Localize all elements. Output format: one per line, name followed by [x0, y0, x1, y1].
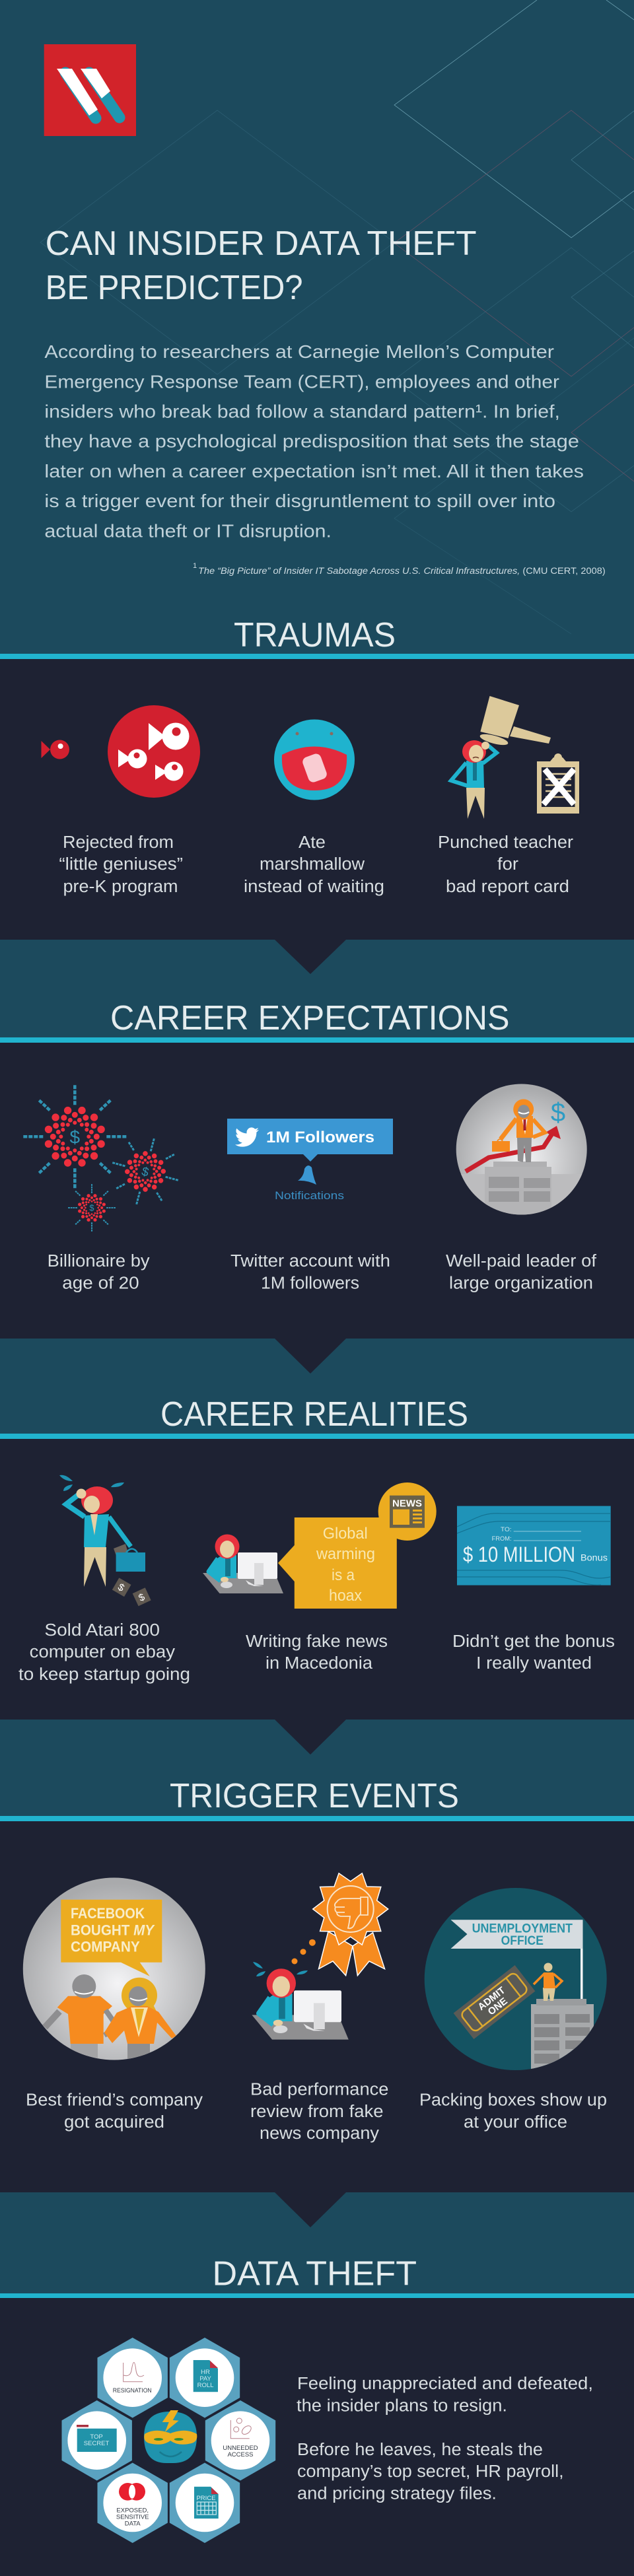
icon: twitter followers: 1M Followers — [266, 1129, 374, 1146]
panel: career realities — [0, 1439, 634, 1755]
caption: punched teacher — [438, 833, 574, 896]
geometric line pattern — [40, 0, 634, 634]
icon: news badge — [378, 1482, 437, 1541]
hexagon: resignation — [98, 2338, 168, 2418]
icon: unemployment office: ONE — [486, 1996, 510, 2017]
caption: punched teacher: for — [497, 855, 519, 874]
icon: bonus check: $ 10 MILLION — [463, 1543, 575, 1566]
title — [46, 225, 477, 307]
caption: punched teacher: Punched teacher — [438, 833, 574, 852]
caption: atari: Sold Atari 800 — [44, 1621, 160, 1640]
hexagon: resignation: RESIGNATION — [113, 2387, 152, 2394]
text: data theft description: Feeling unappreciated and defeated, — [297, 2375, 593, 2393]
hexagon: top secret: SECRET — [84, 2440, 109, 2447]
caption: packing boxes: at your office — [464, 2113, 567, 2132]
icon: leader on building — [456, 1084, 587, 1220]
icon: unemployment office: UNEMPLOYMENT — [472, 1922, 573, 1936]
logo — [44, 44, 136, 136]
intro paragraph: they have a psychological predisposition that sets the stage — [44, 431, 579, 452]
section rule — [0, 1816, 634, 1821]
speech bubble: fake news: hoax — [329, 1587, 362, 1605]
intro paragraph: is a trigger event for their disgruntlement to spill over into — [44, 491, 555, 511]
panel: traumas — [0, 659, 634, 974]
icon: person at desk — [203, 1535, 283, 1593]
caption: bad performance: Bad performance — [250, 2081, 388, 2099]
hexagon: exposed data: EXPOSED, — [116, 2507, 149, 2514]
caption: fake news: Writing fake news — [246, 1632, 388, 1651]
caption: bad performance — [250, 2081, 388, 2143]
text: data theft description: company’s top secret, HR payroll, — [297, 2462, 564, 2481]
icon: twitter followers — [227, 1119, 393, 1202]
caption: best friend — [26, 2091, 203, 2132]
hexagon: exposed data: SENSITIVE — [116, 2513, 149, 2521]
caption: atari — [18, 1621, 190, 1684]
icon: unemployment office: ADMIT — [476, 1985, 507, 2013]
caption: fake news: in Macedonia — [265, 1654, 373, 1673]
caption: leader: Well-paid leader of — [446, 1252, 597, 1271]
speech bubble: fake news: is a — [332, 1566, 355, 1584]
heading: career expectations: CAREER EXPECTATIONS — [110, 999, 510, 1037]
icon: friends with speech bubble: FACEBOOK — [71, 1905, 145, 1922]
icon: crying person with briefcase: $ — [137, 1591, 147, 1604]
hexagon: hr payroll — [170, 2338, 240, 2418]
caption: rejected: pre-K program — [63, 878, 178, 896]
title: BE PREDICTED? — [46, 269, 303, 307]
speech bubble: fake news: Global — [323, 1525, 368, 1543]
hexagon: price — [170, 2463, 240, 2543]
icon: masked hero — [144, 2410, 197, 2463]
icon: crying person with briefcase: $ — [116, 1582, 127, 1594]
hexagon: exposed data: DATA — [125, 2520, 141, 2527]
intro paragraph — [44, 341, 584, 541]
caption: bonus: Didn’t get the bonus — [452, 1632, 615, 1651]
hexagon: hr payroll: ROLL — [197, 2382, 213, 2389]
title: CAN INSIDER DATA THEFT — [46, 225, 477, 263]
caption: rejected: Rejected from — [63, 833, 174, 852]
caption: twitter — [230, 1252, 390, 1293]
caption: marshmallow — [244, 833, 384, 896]
heading: traumas: TRAUMAS — [234, 616, 396, 654]
icon: bonus check: FROM: — [492, 1535, 512, 1542]
icon: gavel — [479, 696, 551, 747]
icon: bonus check — [457, 1506, 611, 1585]
hexagon: unneeded access: ACCESS — [227, 2451, 254, 2458]
caption: atari: computer on ebay — [30, 1643, 175, 1661]
hexagon: hr payroll: PAY — [199, 2375, 211, 2383]
hexagon: top secret — [62, 2400, 132, 2480]
caption: bad performance: news company — [260, 2124, 379, 2143]
icon: friends with speech bubble: COMPANY — [71, 1939, 140, 1955]
hexagon: unneeded access: UNNEEDED — [223, 2445, 258, 2452]
caption: punched teacher: bad report card — [446, 878, 569, 896]
caption: rejected — [59, 833, 183, 896]
caption: billionaire — [48, 1252, 150, 1293]
footnote — [193, 562, 606, 576]
speech bubble: fake news: warming — [316, 1545, 375, 1563]
panel: career expectations — [0, 1043, 634, 1374]
icon: news badge: NEWS — [392, 1499, 422, 1510]
caption: bonus: I really wanted — [476, 1654, 592, 1673]
icon: small fish — [41, 740, 69, 759]
hexagon: unneeded access — [205, 2400, 275, 2480]
caption: rejected: “little geniuses” — [59, 855, 183, 874]
caption: fake news — [246, 1632, 388, 1673]
intro paragraph: insiders who break bad follow a standard pattern¹. In brief, — [44, 401, 560, 421]
footnote: 1 — [193, 562, 197, 570]
section rule — [0, 1434, 634, 1439]
icon: marshmallow face — [274, 720, 355, 800]
speech bubble: fake news — [278, 1517, 397, 1609]
heading: career realities: CAREER REALITIES — [160, 1395, 468, 1434]
caption: billionaire: age of 20 — [62, 1274, 139, 1293]
caption: leader — [446, 1252, 597, 1293]
caption: packing boxes — [419, 2091, 607, 2132]
hexagon: price: PRICE — [196, 2495, 216, 2502]
panel: data theft — [0, 2298, 634, 2576]
caption: billionaire: Billionaire by — [48, 1252, 150, 1271]
caption: bonus — [452, 1632, 615, 1673]
hexagon: exposed data — [98, 2463, 168, 2543]
caption: marshmallow: Ate — [299, 833, 326, 852]
icon: bad review award — [292, 1873, 388, 1976]
caption: bad performance: review from fake — [250, 2103, 383, 2121]
icon: unemployment office — [425, 1888, 607, 2073]
icon: twitter followers: Notifications — [275, 1189, 344, 1202]
text: data theft description — [297, 2375, 593, 2503]
heading: data theft: DATA THEFT — [213, 2255, 417, 2293]
icon: friends with speech bubble — [23, 1878, 205, 2064]
icon: unemployment office: OFFICE — [501, 1934, 544, 1948]
heading: trigger events: TRIGGER EVENTS — [170, 1777, 459, 1815]
icon: bonus check: TO: — [501, 1526, 512, 1533]
section rule — [0, 654, 634, 659]
caption: twitter: Twitter account with — [230, 1252, 390, 1271]
caption: packing boxes: Packing boxes show up — [419, 2091, 607, 2110]
text: data theft description: Before he leaves, he steals the — [297, 2441, 543, 2459]
icon: leader on building: $ — [551, 1098, 565, 1127]
caption: twitter: 1M followers — [261, 1274, 359, 1293]
icon: money bursts — [23, 1085, 187, 1232]
panel: trigger events — [0, 1821, 634, 2227]
icon: friends with speech bubble: BOUGHT MY — [71, 1922, 155, 1939]
hexagon: hr payroll: HR — [201, 2369, 210, 2376]
intro paragraph: actual data theft or IT disruption. — [44, 520, 332, 541]
icon: stressed person at desk — [252, 1962, 349, 2040]
caption: marshmallow: instead of waiting — [244, 878, 384, 896]
intro paragraph: Emergency Response Team (CERT), employees and other — [44, 371, 559, 392]
section rule — [0, 1037, 634, 1043]
icon: red circle with fish — [108, 705, 200, 798]
text: data theft description: and pricing strategy files. — [297, 2484, 497, 2503]
section rule — [0, 2293, 634, 2298]
text: data theft description: the insider plans to resign. — [297, 2397, 507, 2416]
icon: failed report card — [537, 753, 579, 814]
caption: best friend: Best friend’s company — [26, 2091, 203, 2110]
hexagon: top secret: TOP — [90, 2433, 103, 2441]
intro paragraph: According to researchers at Carnegie Mellon’s Computer — [44, 341, 554, 362]
caption: marshmallow: marshmallow — [260, 855, 365, 874]
caption: leader: large organization — [449, 1274, 593, 1293]
icon: crying person with briefcase — [59, 1475, 151, 1606]
caption: best friend: got acquired — [64, 2113, 164, 2132]
caption: atari: to keep startup going — [18, 1665, 190, 1684]
footnote: The “Big Picture” of Insider IT Sabotage Across U.S. Critical Infrastructures, (CMU CERT, 2008) — [198, 566, 606, 576]
icon: bonus check: Bonus — [581, 1552, 608, 1562]
intro paragraph: later on when a career expectation isn’t met. All it then takes — [44, 461, 584, 481]
icon: hurt person — [451, 740, 497, 819]
